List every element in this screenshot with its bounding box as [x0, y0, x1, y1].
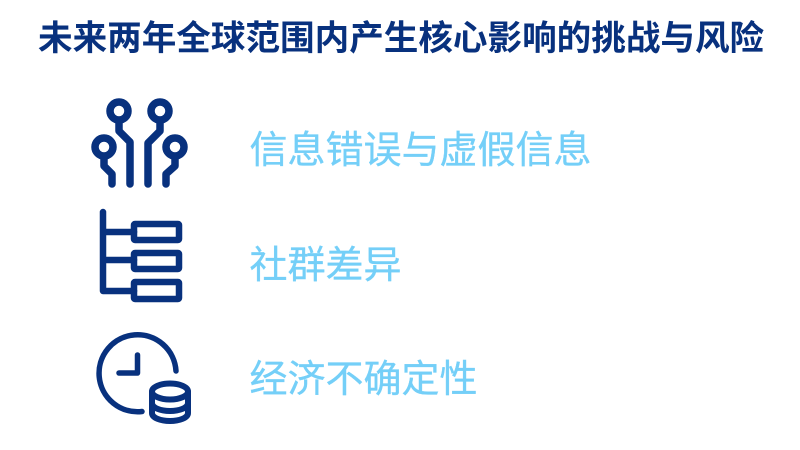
- icon: circuit nodes: [91, 98, 188, 188]
- label: misinformation: 信息错误与虚假信息: [250, 130, 592, 172]
- label: social inequality: 社群差异: [250, 244, 402, 286]
- title: 未来两年全球范围内产生核心影响的挑战与风险: [38, 20, 764, 58]
- label: economic uncertainty: 经济不确定性: [250, 359, 478, 401]
